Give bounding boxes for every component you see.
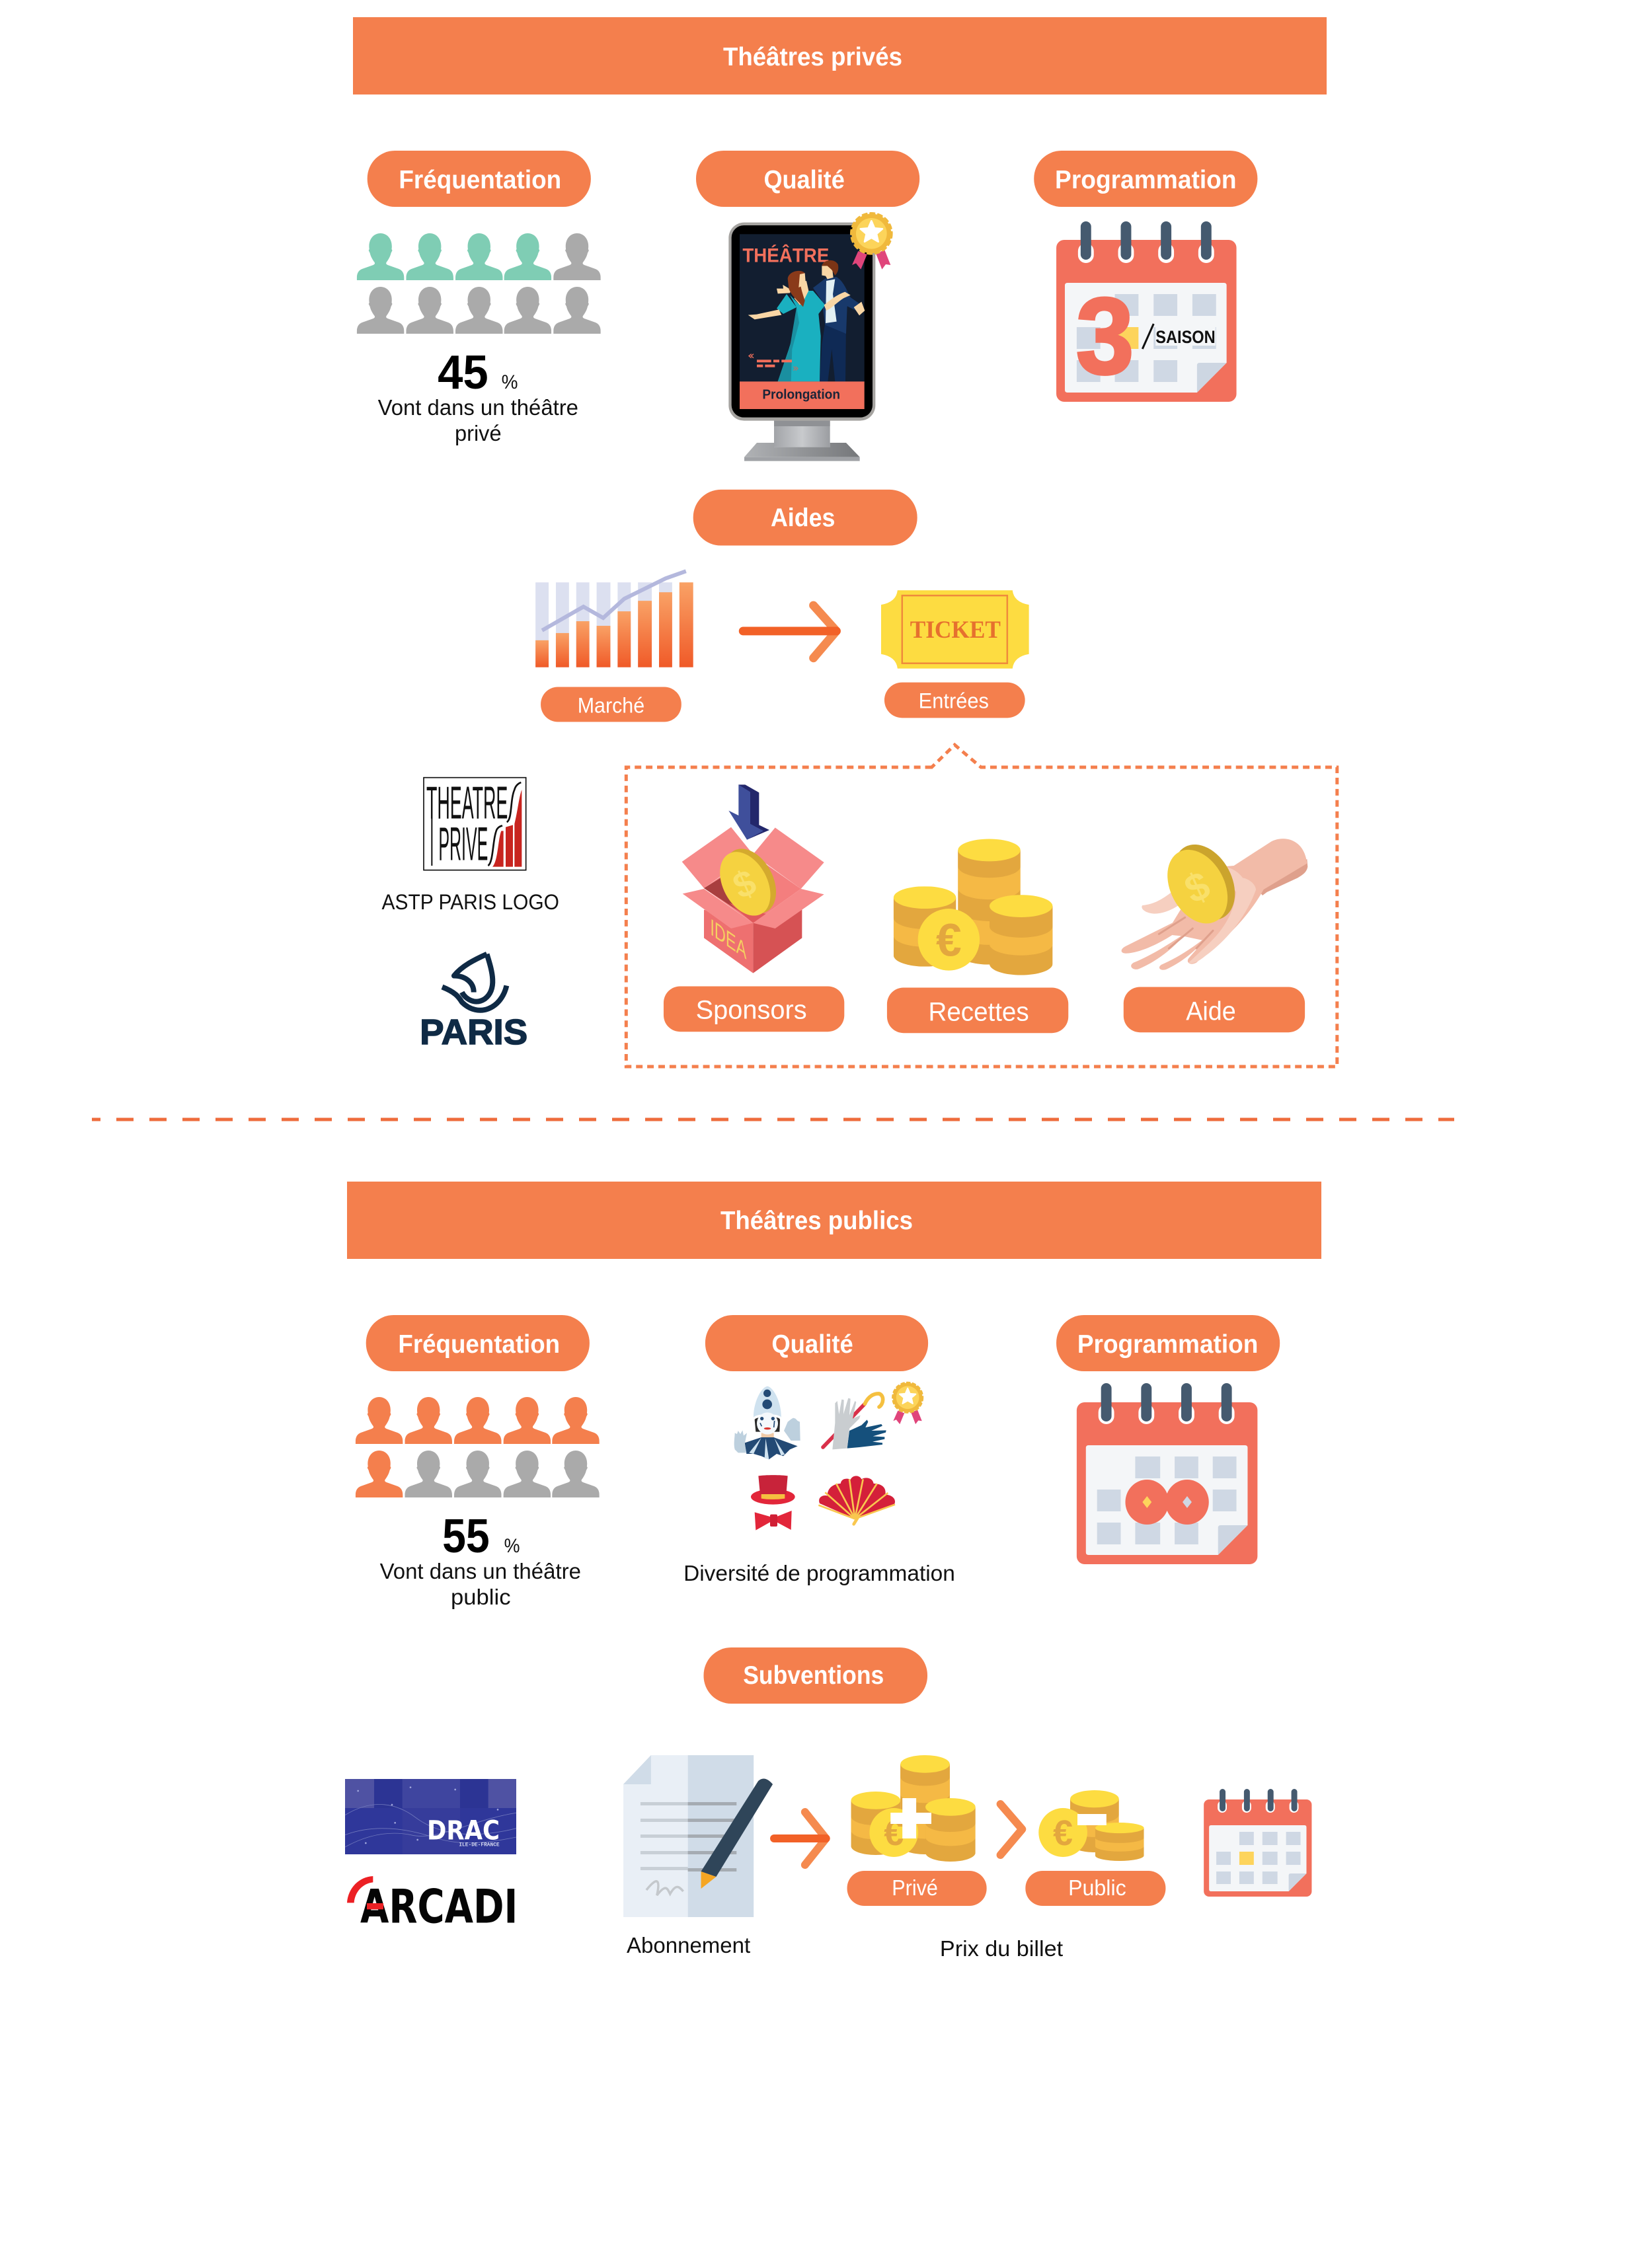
text: vont dans un théâtre privé [378,395,578,445]
statistic: 55 percent: 55 [442,1510,490,1563]
pill: programmation public [1056,1315,1280,1371]
pill: fréquentation public: Fréquentation [398,1330,560,1359]
pill: privé: Privé [892,1875,938,1900]
pill: privé [847,1871,987,1906]
icon: coins minus [1038,1790,1144,1861]
statistic: 45 percent: % [502,371,518,393]
icon: calendar 3 per season: SAISON [1155,327,1216,347]
icon: sponsors box [682,784,824,973]
pill: aide [1124,987,1305,1032]
header: théâtres privés: Théâtres privés [723,43,902,71]
icon: coins plus: € [884,1813,904,1853]
pill: programmation privé [1034,151,1257,207]
icon: calendar 3 per season: 3 [1076,276,1134,397]
bar chart: marché [535,571,693,667]
pill: aides: Aides [771,504,835,533]
panel: sources de financement [626,745,1337,1067]
text: abonnement: Abonnement [627,1933,750,1957]
icon: sponsors box: $ [727,861,762,907]
logo: paris [420,954,527,1052]
icon: calendar 3 per season [1056,221,1237,402]
icon: calendar infinity [1077,1383,1257,1564]
pill: programmation privé: Programmation [1055,166,1237,194]
icon: theatre poster kiosk [728,213,892,461]
pill: marché [541,687,681,722]
logo: drac: DRAC [427,1815,500,1846]
pill: qualité public [705,1315,928,1371]
text: vont dans un théâtre public [380,1559,581,1609]
icon: gloves and cane [823,1382,923,1449]
header: théâtres privés [353,17,1327,94]
logo: théâtre privé [424,776,526,871]
pill: qualité privé [696,151,919,207]
icon: small calendar [1204,1789,1311,1897]
pill: fréquentation privé [368,151,591,207]
icon: coins plus [851,1755,976,1862]
icon: coins minus: € [1053,1813,1073,1853]
pill: qualité public: Qualité [771,1330,853,1359]
arrow: abonnement to prix [774,1812,826,1865]
text: THEATRE [426,776,508,828]
text: vont dans un théâtre privé: Vont dans un théâtre [378,395,578,420]
poster title: THÉÂTRE [742,245,829,267]
pill: fréquentation public [366,1315,590,1371]
pill: aide: Aide [1186,997,1236,1026]
statistic: 55 percent [442,1510,520,1563]
icon: aide hand [1122,834,1307,970]
logo: paris: PARIS [420,1012,527,1052]
text: diversité de programmation: Diversité de programmation [683,1561,955,1585]
icon: ticket: TICKET [910,616,1001,643]
pill: programmation public: Programmation [1077,1330,1258,1359]
icon: aide hand: $ [1178,862,1216,912]
header: théâtres publics [347,1182,1321,1259]
text: prix du billet: Prix du billet [940,1936,1063,1961]
pill: recettes [887,987,1068,1033]
icon: sponsors box: IDEA [710,914,746,965]
icon: people 45 percent [357,233,601,334]
text: vont dans un théâtre privé: privé [455,421,502,445]
icon: recettes coins [894,839,1052,975]
statistic: 45 percent: 45 [438,346,488,399]
woman [748,271,851,381]
pill: subventions: Subventions [743,1661,884,1690]
icon: top hat and bow tie [751,1475,795,1531]
logo: théâtre privé: PRIVE [438,818,488,871]
pill: aides [693,490,917,546]
icon: ticket [881,590,1029,669]
pill: subventions [704,1647,927,1704]
badge [851,213,892,270]
statistic: 55 percent: % [504,1535,520,1557]
text: vont dans un théâtre public: Vont dans un théâtre [380,1559,581,1583]
icon: pierrot [734,1386,800,1459]
pill: sponsors [664,987,844,1032]
poster date marks [749,354,798,371]
pill: public [1025,1871,1165,1906]
logo: arcadi: ARCADI [360,1879,518,1934]
text: vont dans un théâtre public: public [451,1585,511,1609]
pill: entrées [884,683,1025,718]
icon: abonnement document [623,1755,773,1917]
icon: people 55 percent [356,1397,600,1497]
header: théâtres publics: Théâtres publics [720,1207,913,1235]
logo: drac: ILE-DE-FRANCE [459,1842,500,1848]
icon: chevron greater than [1001,1804,1022,1855]
icon: feather fan [818,1476,895,1524]
pill: sponsors: Sponsors [696,995,807,1024]
pill: recettes: Recettes [929,997,1029,1026]
arrow: marché to entrées [743,605,836,658]
icon: recettes coins: € [936,915,962,966]
statistic: 45 percent [438,346,518,399]
pill: entrées: Entrées [919,688,989,712]
pill: qualité privé: Qualité [763,166,845,194]
logo: drac [345,1779,516,1854]
poster caption: Prolongation [762,387,840,402]
text: astp paris logo: ASTP PARIS LOGO [382,889,559,914]
pill: fréquentation privé: Fréquentation [399,166,561,194]
man [777,260,865,381]
pill: public: Public [1068,1875,1126,1900]
pill: marché: Marché [578,693,644,717]
